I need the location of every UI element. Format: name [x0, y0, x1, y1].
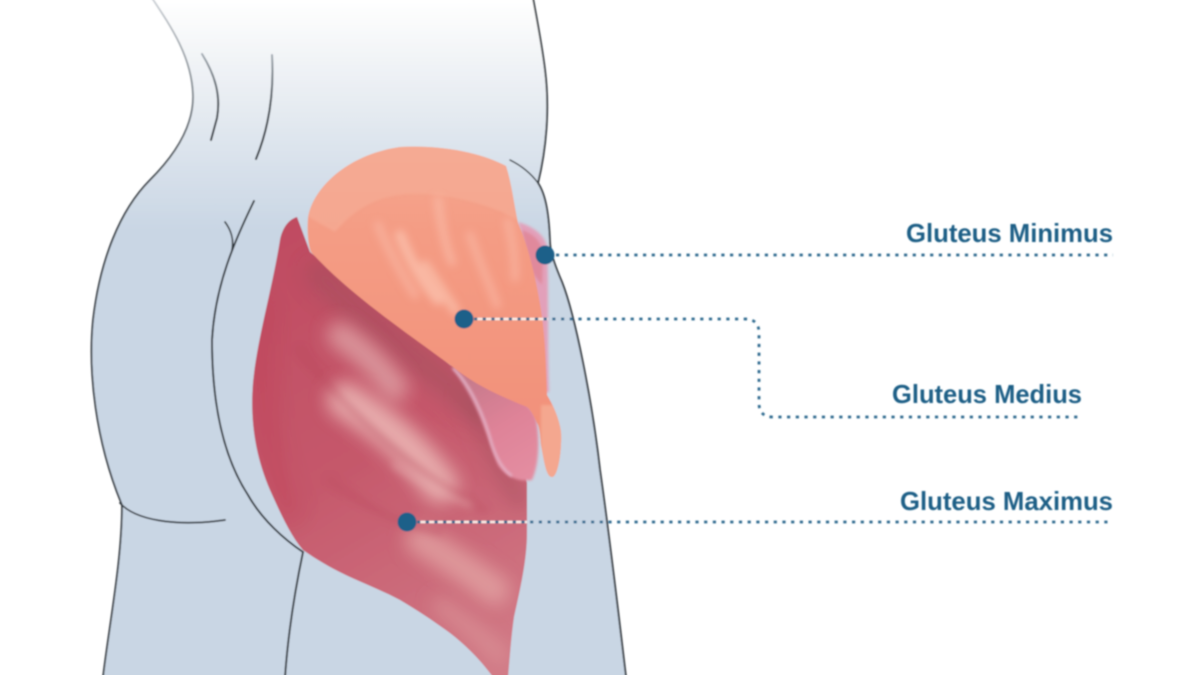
leader: gluteus minimus — [536, 246, 1113, 264]
shaded band under medius — [320, 275, 480, 410]
label: gluteus minimus: Gluteus Minimus — [906, 218, 1113, 248]
broad soft highlights — [340, 335, 395, 388]
body silhouette — [92, 0, 626, 675]
outline: back and buttock — [92, 0, 193, 675]
muscle: gluteus maximus — [252, 217, 527, 675]
label: gluteus maximus: Gluteus Maximus — [900, 486, 1113, 516]
fibres — [328, 384, 482, 509]
skin fold lines — [120, 54, 538, 675]
leader: gluteus medius — [454, 310, 1082, 417]
outline: front of hip and thigh — [533, 0, 626, 675]
upper lighter band — [310, 190, 516, 230]
pink tendon — [450, 365, 538, 480]
label: gluteus medius: Gluteus Medius — [892, 379, 1082, 409]
leader: gluteus maximus — [398, 512, 1113, 532]
muscle: gluteus medius — [300, 130, 565, 480]
muscle: gluteus minimus — [518, 222, 549, 395]
